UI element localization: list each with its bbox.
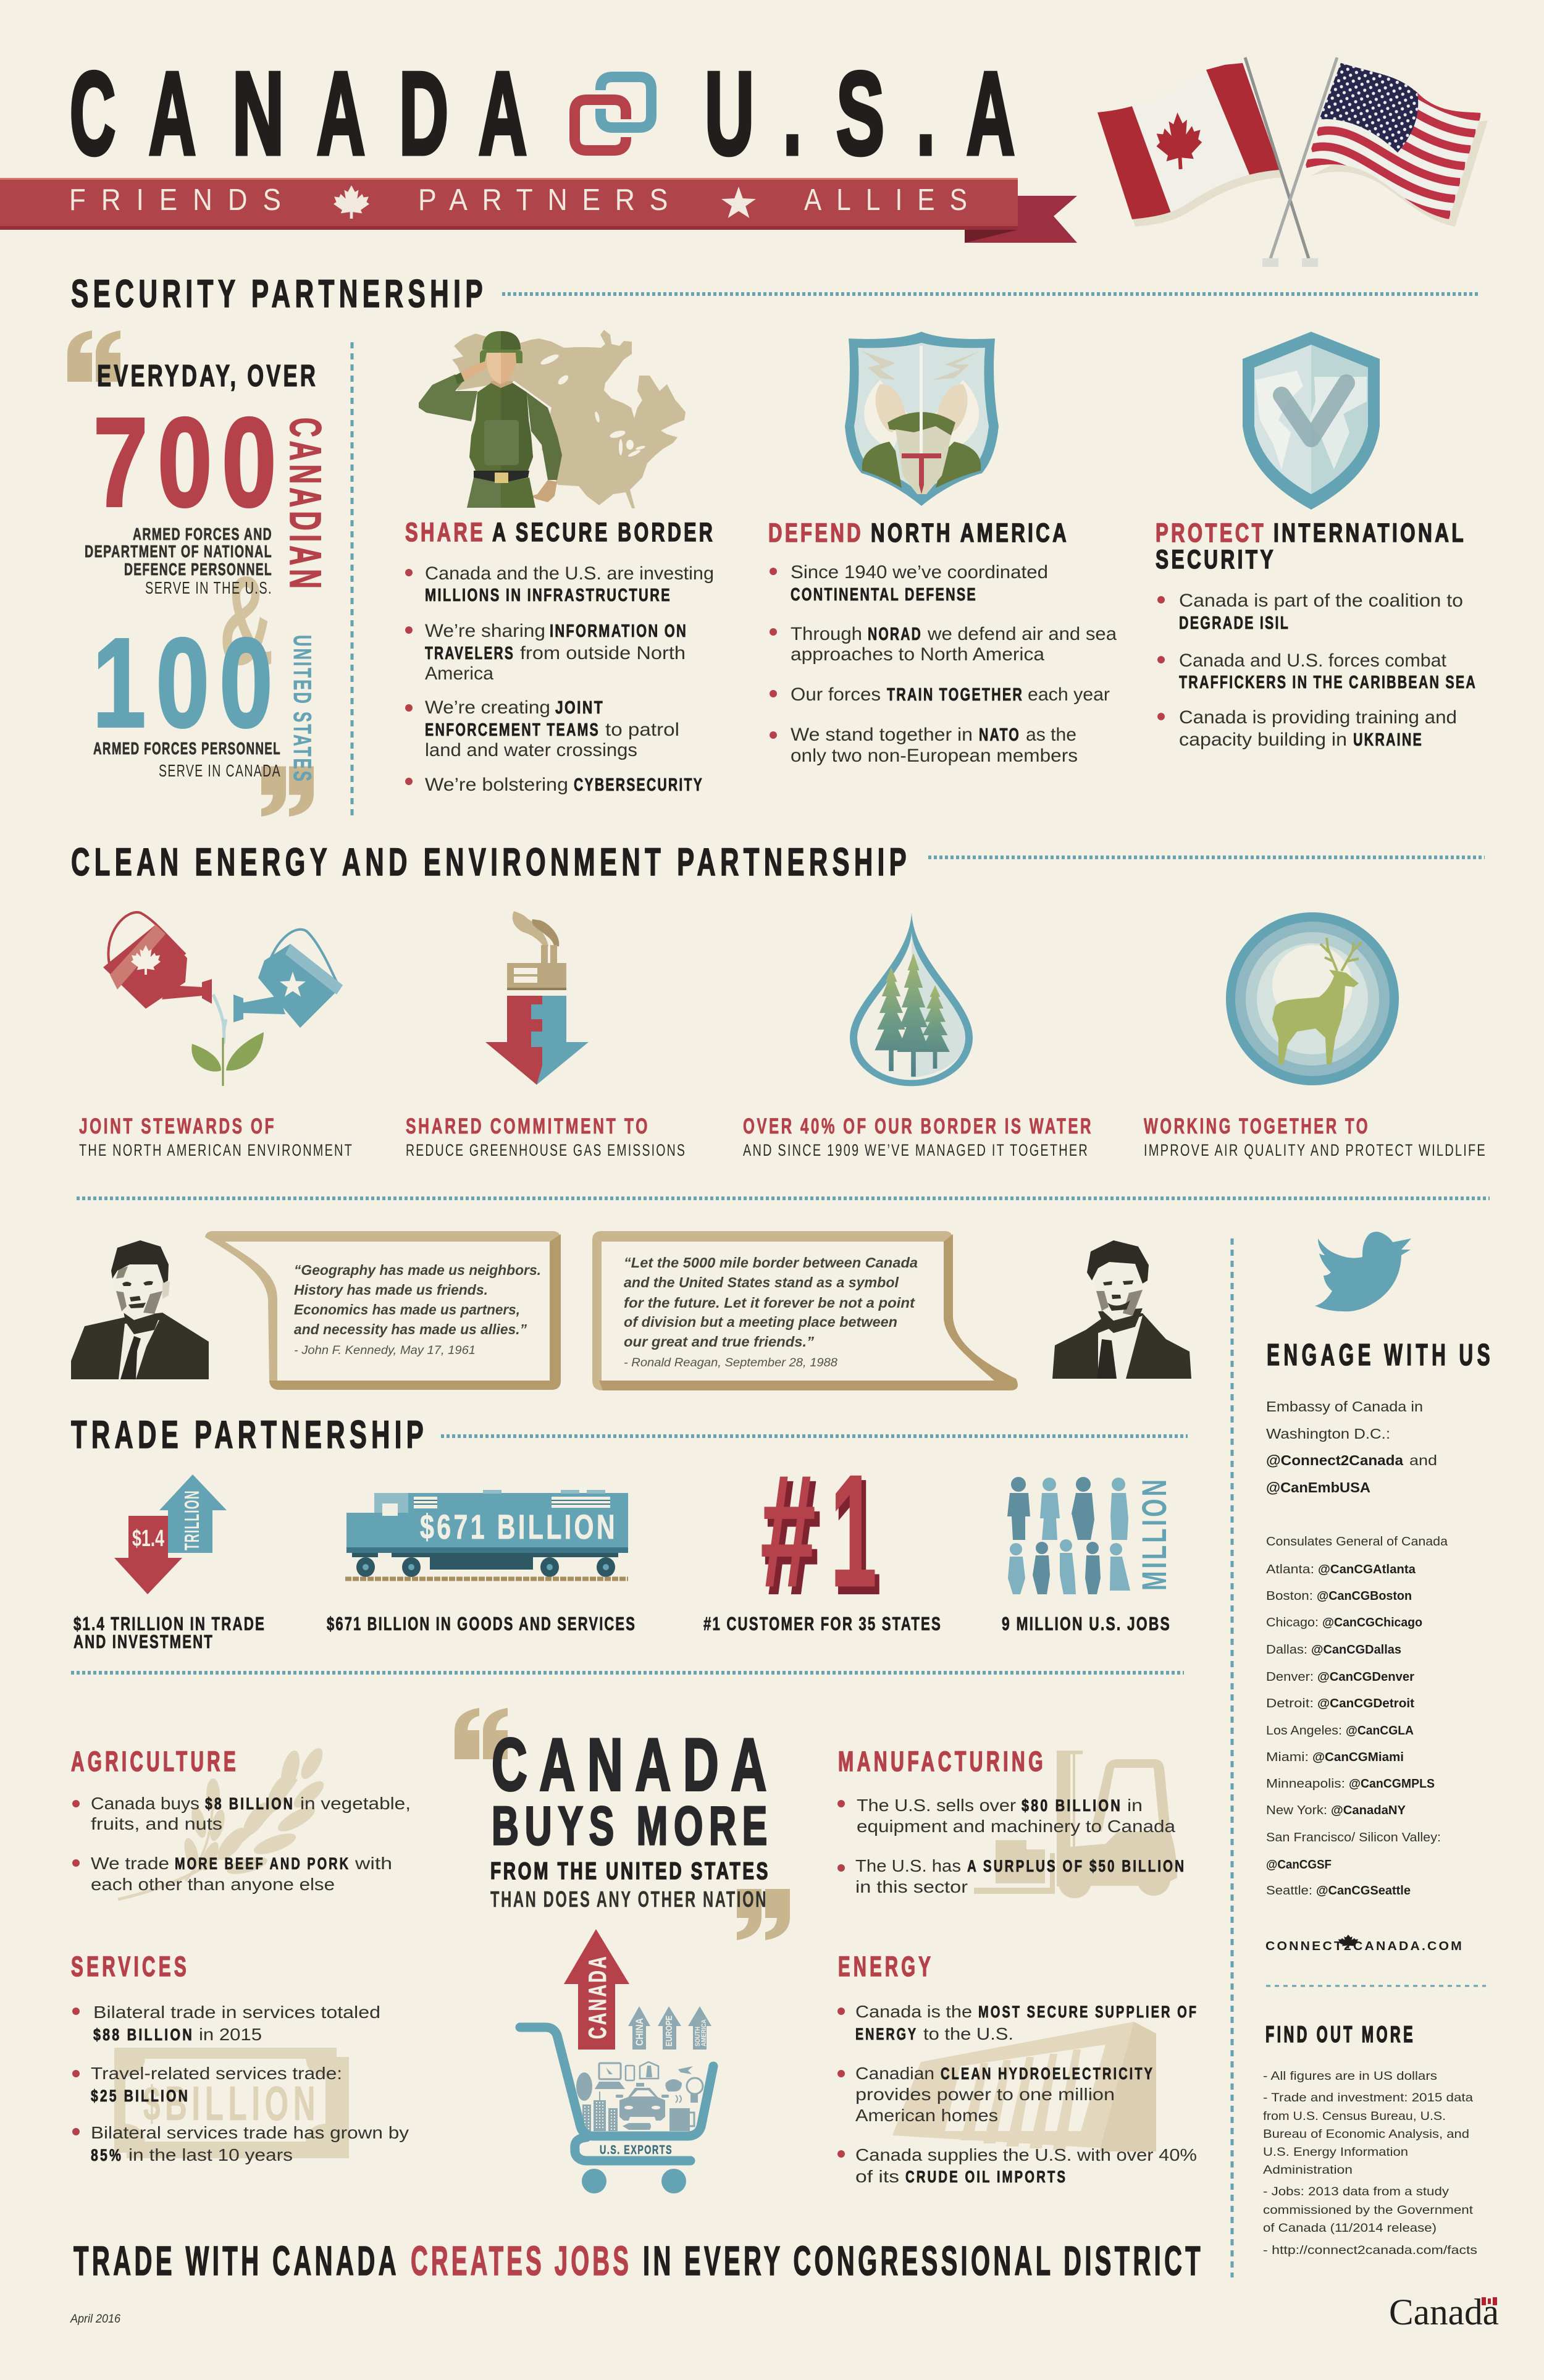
heading: trade partnership: TRADE PARTNERSHIP xyxy=(71,1413,428,1457)
bullets: TRAVELERS xyxy=(425,644,514,663)
icon: flag poles xyxy=(1245,57,1337,267)
portrait: Ronald Reagan xyxy=(1052,1240,1191,1379)
bullets: JOINT xyxy=(555,698,604,718)
text: consulates: @CanCGDallas xyxy=(1311,1643,1401,1657)
heading word: Canada: D xyxy=(399,48,448,179)
text: consulates: Minneapolis: xyxy=(1266,1777,1345,1791)
icon: NORAD shield xyxy=(845,332,999,506)
icon: soldier xyxy=(419,331,562,508)
text: consulates: Denver: xyxy=(1266,1670,1314,1684)
text: consulates: Seattle: xyxy=(1266,1884,1312,1898)
bullets: Since 1940 we’ve coordinated xyxy=(791,562,1048,582)
bottom row xyxy=(1008,1539,1130,1594)
icon: American flag xyxy=(1306,63,1481,219)
callout: Kennedy quote xyxy=(205,1231,561,1390)
bullets: American homes xyxy=(855,2106,998,2125)
quote text: Economics has made us partners, xyxy=(294,1301,520,1318)
captions: $1.4 TRILLION IN TRADE xyxy=(73,1613,266,1634)
panel: engage with us xyxy=(1263,1232,1494,2257)
quote text: History has made us friends. xyxy=(294,1282,488,1298)
icon: forklift xyxy=(974,1751,1177,1898)
text: armed forces personnel: ARMED FORCES PERSONNEL xyxy=(93,739,281,758)
bullets: Our forces xyxy=(791,684,881,705)
text: sources: - Trade and investment: 2015 data xyxy=(1263,2091,1473,2105)
text: consulates: @CanCGMPLS xyxy=(1349,1777,1435,1791)
icon: factory xyxy=(507,945,566,990)
icon: smoke xyxy=(513,911,559,946)
icon: deer in rings xyxy=(1226,912,1399,1085)
icon: interlocking links xyxy=(574,77,651,151)
icon: soldier and map xyxy=(419,330,686,508)
icon: Canada arrow: CANADA xyxy=(584,1954,611,2039)
caption: shared commitment xyxy=(406,1114,686,1159)
quote text: - Ronald Reagan, September 28, 1988 xyxy=(624,1356,837,1369)
text: consulates: San Francisco/ Silicon Valley: xyxy=(1266,1831,1441,1844)
icon: factory emissions arrow xyxy=(485,911,589,1085)
panel: manufacturing xyxy=(837,1746,1186,1898)
bullets: Canada supplies the U.S. with over 40% xyxy=(855,2145,1197,2164)
icon: train xyxy=(345,1490,628,1579)
quote text xyxy=(624,1255,918,1369)
bullets: Canadian xyxy=(855,2064,934,2083)
heading xyxy=(768,518,1069,548)
text: consulates: @CanCGMiami xyxy=(1312,1751,1404,1764)
text: armed forces: SERVE IN THE U.S. xyxy=(145,578,272,597)
captions: 9 MILLION U.S. JOBS xyxy=(1002,1613,1171,1634)
icon: workers xyxy=(1007,1477,1173,1594)
text: sources: - http://connect2canada.com/facts xyxy=(1263,2243,1477,2257)
bullets: CRUDE OIL IMPORTS xyxy=(905,2168,1067,2186)
captions xyxy=(73,1613,1171,1652)
text: consulates: @CanCGAtlanta xyxy=(1318,1563,1416,1576)
text: armed forces: DEFENCE PERSONNEL xyxy=(124,560,272,579)
text: consulates: Consulates General of Canada xyxy=(1266,1535,1448,1549)
panel: trade stats xyxy=(73,1442,1173,1652)
caption: joint stewards: THE NORTH AMERICAN ENVIRONMENT xyxy=(79,1141,353,1159)
text: armed forces personnel: SERVE IN CANADA xyxy=(159,761,281,780)
bullets: The U.S. sells over xyxy=(857,1796,1016,1815)
text: consulates: Dallas: xyxy=(1266,1643,1307,1657)
bullets: capacity building in xyxy=(1179,730,1347,750)
text: consulates: @CanCGChicago xyxy=(1322,1616,1422,1629)
heading word: Canada: N xyxy=(232,48,284,179)
captions: AND INVESTMENT xyxy=(73,1631,214,1652)
bullets: of its xyxy=(855,2167,899,2186)
bullets: Canada and the U.S. are investing xyxy=(425,563,714,584)
icon: crossed flags xyxy=(1093,57,1488,267)
heading word: USA: A xyxy=(967,48,1015,179)
text: armed forces: ARMED FORCES AND xyxy=(133,524,272,544)
bullets xyxy=(837,2002,1198,2186)
text: sources: Bureau of Economic Analysis, and xyxy=(1263,2127,1469,2141)
heading word: Canada: A xyxy=(149,48,196,179)
icon: split arrow xyxy=(485,996,589,1085)
bullets: CYBERSECURITY xyxy=(574,775,703,795)
bullets: each other than anyone else xyxy=(91,1875,335,1894)
bullets: Canada is providing training and xyxy=(1179,707,1457,728)
icon: hydro dam xyxy=(892,2022,1156,2151)
heading: SERVICES xyxy=(71,1951,190,1982)
icon: water drop with trees xyxy=(850,912,973,1086)
text: armed forces personnel xyxy=(93,739,281,780)
icon: dollar bill: $BILLION xyxy=(143,2076,320,2130)
icon: number one: # xyxy=(765,1448,820,1627)
text: embassy xyxy=(1266,1398,1437,1495)
banner: friends partners allies: ALLIES xyxy=(804,183,982,217)
text: sources xyxy=(1263,2069,1477,2257)
text: embassy: Embassy of Canada in xyxy=(1266,1398,1423,1415)
bullets: in vegetable, xyxy=(300,1794,411,1813)
bullets: in the last 10 years xyxy=(128,2145,293,2164)
heading: clean energy and environment partnership: CLEAN ENERGY AND ENVIRONMENT PARTNERSHIP xyxy=(71,841,911,884)
text: consulates xyxy=(1266,1535,1448,1898)
bullets: in this sector xyxy=(855,1877,968,1896)
icon: twitter bird xyxy=(1315,1232,1411,1311)
icon: number one: # xyxy=(760,1442,816,1621)
icon: North America map xyxy=(452,330,686,508)
text: consulates: Miami: xyxy=(1266,1751,1309,1764)
icon: cart frame: U.S. EXPORTS xyxy=(600,2143,673,2157)
text: consulates: @CanCGLA xyxy=(1346,1724,1414,1738)
bullets: $88 BILLION xyxy=(93,2025,194,2044)
bullets: We’re creating xyxy=(425,697,550,718)
icon: Canada arrow xyxy=(564,1929,629,2050)
caption: border water: AND SINCE 1909 WE’VE MANAGED IT TOGETHER xyxy=(743,1141,1089,1159)
panel: energy xyxy=(837,1951,1198,2186)
captions: $671 BILLION IN GOODS AND SERVICES xyxy=(327,1613,636,1634)
text: consulates: Detroit: xyxy=(1266,1697,1314,1710)
icon: dollar bill xyxy=(120,2053,349,2158)
icon: cart goods xyxy=(576,2062,703,2131)
bullets: NORAD xyxy=(868,624,922,644)
icon: Canadian flag xyxy=(1097,63,1279,219)
text: consulates: Boston: xyxy=(1266,1589,1313,1603)
banner: friends partners allies: PARTNERS xyxy=(418,183,682,217)
text: sources: of Canada (11/2014 release) xyxy=(1263,2221,1437,2235)
callout: Canada buys more: BUYS MORE xyxy=(492,1795,773,1856)
icon: open quote xyxy=(455,1708,508,1759)
icon: number one: 1 xyxy=(834,1448,881,1627)
quote text: “Geography has made us neighbors. xyxy=(294,1262,541,1278)
text: website: CONNECT2CANADA.COM xyxy=(1265,1940,1464,1953)
icon: close quote xyxy=(261,767,314,817)
bullets: fruits, and nuts xyxy=(91,1814,222,1833)
banner: friends partners allies: FRIENDS xyxy=(69,183,296,217)
text: embassy: Washington D.C.: xyxy=(1266,1426,1390,1442)
text: armed forces: DEPARTMENT OF NATIONAL xyxy=(85,542,272,561)
bullets: Bilateral trade in services totaled xyxy=(93,2003,380,2022)
heading: ENERGY xyxy=(838,1951,934,1982)
icon: export arrows: CHINA xyxy=(634,2018,645,2046)
text: date: April 2016 xyxy=(70,2313,120,2326)
heading: MANUFACTURING xyxy=(838,1746,1046,1777)
bullets: we defend air and sea xyxy=(927,624,1117,644)
bullets: TRAIN TOGETHER xyxy=(887,685,1023,705)
heading: FIND OUT MORE xyxy=(1265,2022,1416,2047)
text: consulates: @CanCGSeattle xyxy=(1316,1884,1411,1898)
heading word: Canada: C xyxy=(70,48,115,179)
icon: wheat xyxy=(118,1745,328,1899)
heading: trade creates jobs: TRADE WITH CANADA xyxy=(73,2238,400,2284)
bullets xyxy=(1157,591,1477,750)
portrait: John F. Kennedy xyxy=(71,1240,209,1379)
icon: cart frame xyxy=(520,2027,713,2193)
quote text xyxy=(294,1262,541,1357)
callout: Canada buys more: THAN DOES ANY OTHER NATION xyxy=(490,1886,768,1912)
caption: border water xyxy=(743,1114,1093,1159)
caption: working together: WORKING TOGETHER TO xyxy=(1144,1114,1370,1138)
icon: water stream xyxy=(213,994,226,1044)
heading word: USA: . xyxy=(917,48,935,179)
icon: world shield xyxy=(1243,332,1380,510)
text: consulates: @CanCGDenver xyxy=(1317,1670,1414,1684)
panel: agriculture xyxy=(71,1745,411,1899)
icon: shopping cart of exports xyxy=(520,1929,713,2193)
quote text: for the future. Let it forever be not a point xyxy=(624,1295,915,1311)
bullets: ENFORCEMENT TEAMS xyxy=(425,720,600,740)
bullets: approaches to North America xyxy=(791,644,1044,665)
text: sources: from U.S. Census Bureau, U.S. xyxy=(1263,2109,1446,2123)
icon: number one: 1 xyxy=(830,1442,877,1621)
icon: close quote xyxy=(737,1889,790,1940)
heading xyxy=(1156,518,1466,574)
bullets: Canada and U.S. forces combat xyxy=(1179,650,1447,671)
text: sources: commissioned by the Government xyxy=(1263,2203,1474,2217)
icon: export arrows: AMERICA xyxy=(700,2019,708,2046)
icon: teal can xyxy=(233,930,343,1028)
logo: Canada wordmark: Canada xyxy=(1389,2292,1499,2332)
icon: watering cans and plant xyxy=(103,912,343,1086)
bullets: equipment and machinery to Canada xyxy=(857,1817,1175,1836)
heading word: Canada: A xyxy=(317,48,365,179)
heading: PROTECT xyxy=(1156,518,1266,548)
bullets: We trade xyxy=(91,1854,169,1873)
bullets xyxy=(837,1796,1186,1896)
text: consulates: @CanadaNY xyxy=(1331,1804,1406,1817)
panel: everyday stat xyxy=(67,330,329,817)
icon: ampersand: & xyxy=(219,550,274,691)
heading word: USA: . xyxy=(783,48,802,179)
heading word: USA: S xyxy=(836,48,884,179)
bullets xyxy=(72,1794,411,1894)
quote text: of division but a meeting place between xyxy=(624,1314,897,1330)
icon: plant xyxy=(191,1032,264,1086)
bullets: provides power to one million xyxy=(855,2085,1115,2104)
bullets: CLEAN HYDROELECTRICITY xyxy=(941,2064,1154,2083)
bullets: as the xyxy=(1026,725,1076,745)
bullets: CONTINENTAL DEFENSE xyxy=(791,585,977,605)
banner: friends partners allies xyxy=(0,178,1077,243)
bullets: MOST SECURE SUPPLIER OF xyxy=(978,2003,1198,2021)
text: sources: U.S. Energy Information xyxy=(1263,2145,1408,2159)
quote text: “Let the 5000 mile border between Canada xyxy=(624,1255,918,1271)
heading word: Canada xyxy=(70,48,527,179)
bullets: $25 BILLION xyxy=(91,2087,190,2105)
heading: SHARE xyxy=(405,518,485,547)
text: embassy: @CanEmbUSA xyxy=(1266,1479,1370,1495)
text: consulates: Los Angeles: xyxy=(1266,1724,1342,1738)
icon: trade arrows: $1.4 xyxy=(132,1526,164,1552)
icon: deer xyxy=(1272,938,1362,1064)
bullets: each year xyxy=(1028,684,1110,705)
stat label: Canadian: CANADIAN xyxy=(280,418,329,592)
bullets: $80 BILLION xyxy=(1022,1796,1122,1815)
callout: Reagan quote xyxy=(592,1231,1018,1390)
top row xyxy=(1007,1477,1128,1540)
caption: border water: OVER 40% OF OUR BORDER IS WATER xyxy=(743,1114,1093,1138)
icon: trade arrows xyxy=(114,1474,227,1594)
bullets: Canada is part of the coalition to xyxy=(1179,591,1463,611)
bullets: MORE BEEF AND PORK xyxy=(175,1854,350,1873)
bullets: only two non-European members xyxy=(791,746,1078,766)
heading word: USA: U xyxy=(705,48,754,179)
caption: shared commitment: REDUCE GREENHOUSE GAS EMISSIONS xyxy=(406,1141,686,1159)
text: sources: Administration xyxy=(1263,2163,1353,2177)
bullets: MILLIONS IN INFRASTRUCTURE xyxy=(425,586,671,605)
captions: #1 CUSTOMER FOR 35 STATES xyxy=(703,1613,942,1634)
heading: trade creates jobs: CREATES JOBS xyxy=(411,2238,632,2284)
bullets: DEGRADE ISIL xyxy=(1179,613,1290,633)
text: armed forces xyxy=(85,524,272,597)
callout: Canada buys more xyxy=(455,1708,790,1940)
quote text: our great and true friends.” xyxy=(624,1334,815,1350)
bullets: from outside North xyxy=(520,643,686,663)
caption: shared commitment: SHARED COMMITMENT TO xyxy=(406,1114,650,1138)
heading: INTERNATIONAL xyxy=(1273,518,1466,548)
bullets: land and water crossings xyxy=(425,740,637,760)
quote text: and the United States stand as a symbol xyxy=(624,1274,899,1290)
text: sources: - Jobs: 2013 data from a study xyxy=(1263,2185,1449,2198)
bullets: A SURPLUS OF $50 BILLION xyxy=(967,1857,1186,1875)
text: consulates: New York: xyxy=(1266,1804,1327,1817)
bullets: 85% xyxy=(91,2146,123,2164)
bullets: America xyxy=(425,663,493,684)
panel: defend north america xyxy=(768,518,1117,766)
icon: flag shadow xyxy=(1101,120,1488,227)
quote text: - John F. Kennedy, May 17, 1961 xyxy=(294,1344,476,1357)
text: sources: - All figures are in US dollars xyxy=(1263,2069,1437,2083)
heading: A SECURE BORDER xyxy=(492,518,715,547)
icon: export arrows: EUROPE xyxy=(664,2016,674,2046)
caption: working together xyxy=(1144,1114,1487,1159)
icon: open quote xyxy=(67,330,120,382)
text: consulates: @CanCGDetroit xyxy=(1317,1697,1414,1710)
bullets: Bilateral services trade has grown by xyxy=(91,2123,409,2142)
bullets: with xyxy=(355,1854,392,1873)
bullets: NATO xyxy=(979,725,1020,745)
icon: export arrows: SOUTH xyxy=(694,2027,702,2046)
panel: environment captions xyxy=(79,1114,1487,1159)
bullets: UKRAINE xyxy=(1353,730,1423,750)
icon: workers: MILLION xyxy=(1135,1477,1173,1591)
heading: AGRICULTURE xyxy=(71,1746,239,1777)
bullets: Through xyxy=(791,624,862,644)
text: consulates: Atlanta: xyxy=(1266,1563,1314,1576)
panel: protect international security xyxy=(1156,518,1477,750)
bullets: INFORMATION ON xyxy=(550,621,687,641)
bullets: to patrol xyxy=(605,720,679,740)
icon: export arrows xyxy=(628,2006,711,2050)
bullets: in xyxy=(1127,1796,1143,1815)
caption: joint stewards xyxy=(79,1114,353,1159)
text: consulates: Chicago: xyxy=(1266,1616,1319,1629)
heading: DEFEND xyxy=(768,518,863,548)
bullets: to the U.S. xyxy=(923,2024,1013,2043)
heading word: Canada: A xyxy=(479,48,527,179)
icon: red can xyxy=(103,912,212,1009)
heading: security partnership: SECURITY PARTNERSHIP xyxy=(71,272,487,316)
heading: trade creates jobs xyxy=(73,2238,1204,2284)
bullets: We’re sharing xyxy=(425,621,545,641)
bullets: Canada buys xyxy=(91,1794,199,1813)
bullets: Canada is the xyxy=(855,2002,972,2021)
text: consulates: @CanCGBoston xyxy=(1317,1589,1412,1603)
icon: train: $671 BILLION xyxy=(420,1507,618,1546)
heading: SECURITY xyxy=(1156,545,1276,574)
callout: Canada buys more: CANADA xyxy=(492,1723,779,1806)
stat: 100: 100 xyxy=(93,612,283,754)
bullets: We stand together in xyxy=(791,725,973,745)
bullets: We’re bolstering xyxy=(425,775,568,795)
text: embassy: and xyxy=(1409,1452,1437,1468)
caption: joint stewards: JOINT STEWARDS OF xyxy=(79,1114,276,1138)
panel: share a secure border xyxy=(405,518,715,795)
icon: trade arrows: TRILLION xyxy=(180,1490,203,1550)
stat: 700: 700 xyxy=(93,392,286,533)
stat label: United States: UNITED STATES xyxy=(288,635,316,783)
quote text: and necessity has made us allies.” xyxy=(294,1321,527,1337)
text: consulates: @CanCGSF xyxy=(1266,1858,1332,1872)
bullets: Travel-related services trade: xyxy=(91,2064,342,2083)
title xyxy=(70,48,1015,179)
heading word: USA xyxy=(705,48,1015,179)
heading xyxy=(405,518,715,547)
bullets xyxy=(405,563,714,795)
panel: services xyxy=(71,1951,409,2164)
text: website xyxy=(1265,1935,1464,1953)
bullets xyxy=(72,2003,409,2164)
bullets xyxy=(770,562,1117,766)
bullets: in 2015 xyxy=(199,2025,262,2044)
bullets: ENERGY xyxy=(855,2025,918,2043)
bullets: $8 BILLION xyxy=(205,1794,295,1813)
callout: Canada buys more: FROM THE UNITED STATES xyxy=(490,1858,770,1885)
heading: NORTH AMERICA xyxy=(871,518,1069,548)
bullets: The U.S. has xyxy=(855,1856,961,1875)
heading: everyday over: EVERYDAY, OVER xyxy=(97,360,318,393)
text: embassy: @Connect2Canada xyxy=(1266,1452,1403,1468)
